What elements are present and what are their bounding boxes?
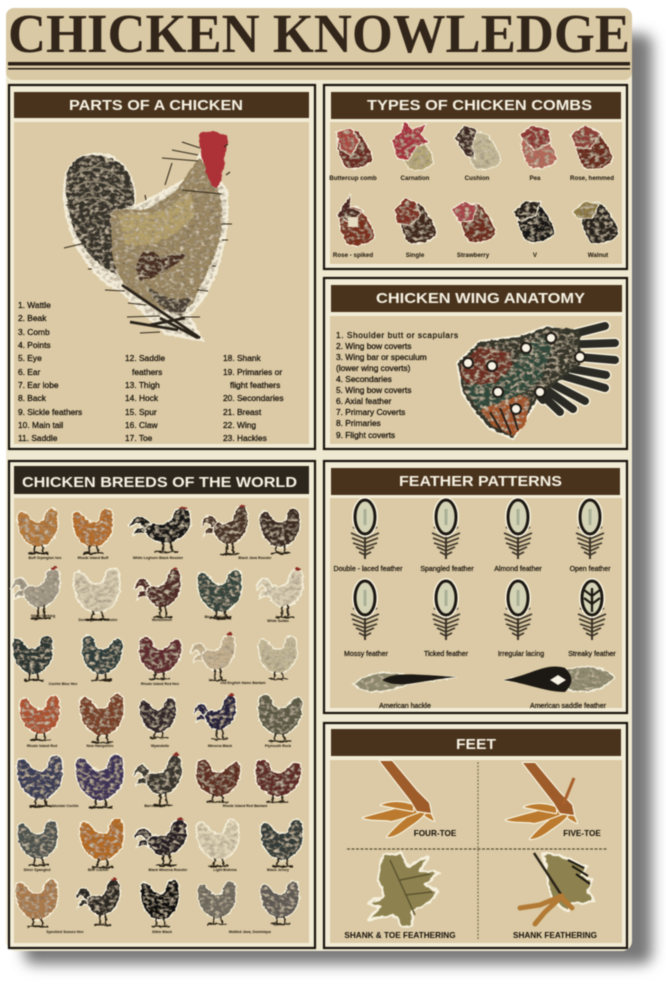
panel: feather patterns (324, 461, 627, 713)
panel: feet (324, 723, 627, 948)
legend column one: 4. Points (18, 340, 51, 350)
breed chickens row 2: Dorking White Rooster (79, 618, 118, 622)
heading: chicken breeds of the world: CHICKEN BREEDS OF THE WORLD (22, 474, 297, 491)
breed chickens row 7 (16, 877, 299, 934)
breed chickens row 7: Mottled Java, Dominique (229, 930, 271, 934)
foot: four-toe (363, 761, 457, 838)
heading: feet: FEET (456, 736, 496, 753)
icon: strawberry comb (452, 202, 495, 259)
icon: walnut comb: Walnut (588, 252, 608, 259)
breed chickens row 5: Rhode Island Red Bantam (223, 804, 267, 808)
heading: chicken wing anatomy (331, 285, 622, 312)
breed chickens row 3: Rhode Island Red Hen (141, 682, 179, 686)
legend column one (18, 300, 82, 443)
feather: spangled (420, 500, 474, 573)
breed chickens row 2: White Sultan (267, 619, 289, 623)
heading: chicken breeds of the world (14, 466, 309, 494)
illustration: rooster with pointer lines (63, 131, 232, 342)
breed chickens row 1: Black Java Rooster (238, 556, 272, 560)
breed chickens row 4: Rhode Island Red (27, 744, 57, 748)
feather: american hackle: American hackle (379, 703, 431, 710)
breed chickens row 6: Light Brahma (213, 868, 238, 872)
icon: strawberry comb: Strawberry (457, 252, 490, 259)
icon: pea comb (520, 126, 556, 182)
breed chickens row 6: Black Minorca Rooster (149, 868, 188, 872)
feather: ticked: Ticked feather (424, 651, 469, 658)
feather: streaky (568, 581, 616, 658)
breed chickens row 3 (13, 632, 297, 686)
icon: rose hemmed comb (570, 126, 614, 182)
breed chickens row 1: Rhode Island Buff (78, 556, 109, 560)
legend column three (223, 353, 284, 443)
icon: buttercup comb (329, 129, 377, 182)
legend column two: 14. Hock (125, 393, 159, 403)
feather: american saddle feather (503, 667, 615, 710)
icon: pea comb: Pea (529, 175, 541, 182)
heading: types of chicken combs (331, 92, 621, 119)
wing legend: 6. Axial feather (336, 396, 392, 406)
legend column three: 21. Breast (223, 407, 262, 417)
foot: shank feathering: SHANK FEATHERING (513, 931, 597, 940)
legend column two: 17. Toe (125, 433, 153, 443)
foot: four-toe: FOUR-TOE (414, 829, 457, 838)
wing legend: 9. Flight coverts (336, 430, 395, 440)
icon: carnation comb (392, 122, 433, 182)
legend column three: flight feathers (230, 380, 280, 390)
icon: rose spiked comb: Rose - spiked (333, 252, 373, 259)
breed chickens row 5: Blue Andalusian Cochin (37, 804, 79, 808)
foot: five-toe (506, 763, 601, 839)
breed chickens row 7: Silkie Black (152, 930, 172, 934)
breed chickens row 3: Old English Game Bantam (220, 681, 266, 685)
feather: irregular lacing: Irregular lacing (498, 651, 544, 658)
foot: five-toe: FIVE-TOE (563, 829, 601, 838)
breed chickens row 6: Black Jersey (267, 868, 289, 872)
breed chickens row 5 (17, 753, 301, 808)
legend column two (125, 353, 165, 443)
legend column one: 5. Eye (18, 353, 42, 363)
wing legend: 2. Wing bow coverts (336, 341, 411, 351)
feather: mossy (344, 581, 389, 658)
panel: chicken breeds of the world (9, 461, 315, 948)
legend column three: 18. Shank (223, 353, 262, 363)
feather: almond (494, 500, 542, 573)
icon: single comb (395, 199, 436, 259)
legend column one: 10. Main tail (18, 420, 63, 430)
feather: almond: Almond feather (494, 566, 542, 573)
icon: V comb (514, 202, 554, 259)
icon: carnation comb: Carnation (401, 175, 430, 182)
legend column three: 19. Primaries or (223, 367, 282, 377)
wing legend: 5. Wing bow coverts (336, 385, 411, 395)
foot: shank and toe feathering (344, 853, 456, 940)
legend column three: 20. Secondaries (223, 393, 284, 403)
icon: walnut comb (573, 202, 618, 259)
legend column one: 1. Wattle (18, 300, 51, 310)
heading: chicken wing anatomy: CHICKEN WING ANATOMY (376, 290, 585, 307)
breed chickens row 7: Speckled Sussex Hen (46, 930, 84, 934)
breed chickens row 2: Welsummer (152, 618, 173, 622)
legend column one: 2. Beak (18, 313, 47, 323)
wing legend (336, 330, 458, 440)
legend column one: 3. Comb (18, 327, 50, 337)
legend column two: 13. Thigh (125, 380, 160, 390)
breed chickens row 1: Buff Orpington hen (29, 556, 61, 560)
wing legend: 7. Primary Coverts (336, 407, 405, 417)
quadrant dividers (347, 762, 607, 940)
feather: spangled: Spangled feather (420, 566, 474, 573)
illustration: wing with numbered markers (458, 326, 615, 438)
feather: double-laced (334, 500, 403, 573)
wing legend: 1. Shoulder butt or scapulars (336, 330, 458, 340)
legend column three: 22. Wing (223, 420, 256, 430)
breed chickens row 4: New Hampshire (87, 744, 113, 748)
icon: rose hemmed comb: Rose, hemmed (570, 175, 614, 182)
icon: cushion comb: Cushion (465, 175, 490, 182)
breed chickens row 4: Wyandotte (151, 744, 169, 748)
legend column two: 12. Saddle (125, 353, 165, 363)
breed chickens row 1: White Leghorn Black Rooster (133, 556, 184, 560)
icon: rose spiked comb (333, 196, 374, 259)
breed chickens row 6 (18, 817, 302, 872)
heading: parts of a chicken: PARTS OF A CHICKEN (69, 97, 243, 114)
foot: shank feathering (513, 853, 597, 940)
feather: open (570, 500, 611, 573)
feather: american saddle feather: American saddle feather (530, 703, 607, 710)
legend column one: 8. Back (18, 393, 47, 403)
breed chickens row 2: Blue Australorp (205, 615, 232, 619)
icon: V comb: V (533, 252, 538, 259)
wing legend: 4. Secondaries (336, 374, 392, 384)
heading: types of chicken combs: TYPES OF CHICKEN COMBS (367, 97, 592, 114)
breed chickens row 5: Barred Rock (144, 804, 166, 808)
feather: double-laced: Double - laced feather (334, 566, 403, 573)
heading: feet (331, 729, 621, 756)
legend column two: 15. Spur (125, 407, 157, 417)
heading: feather patterns: FEATHER PATTERNS (399, 473, 562, 490)
heading: feather patterns (331, 468, 620, 495)
breed chickens row 4: Plymouth Rock (265, 744, 291, 748)
title: CHICKEN KNOWLEDGE (8, 3, 630, 64)
legend column one: 11. Saddle (18, 433, 58, 443)
legend column three: 23. Hackles (223, 433, 267, 443)
breed chickens row 2 (12, 566, 302, 623)
feather: american hackle (353, 672, 457, 710)
legend column two: feathers (132, 367, 162, 377)
breed chickens row 4 (20, 694, 302, 748)
feather: irregular lacing (498, 581, 544, 658)
legend column one: 6. Ear (18, 367, 41, 377)
panel: parts of a chicken (9, 85, 315, 449)
feather: mossy: Mossy feather (344, 651, 389, 658)
feather: streaky: Streaky feather (568, 651, 616, 658)
breed chickens row 6: Buff Cochin (88, 868, 108, 872)
wing legend: 8. Primaries (336, 418, 381, 428)
panel: chicken wing anatomy (324, 278, 627, 449)
legend column two: 16. Claw (125, 420, 159, 430)
breed chickens row 4: Minorca Black (208, 744, 232, 748)
feather: ticked (424, 581, 469, 658)
legend column one: 9. Sickle feathers (18, 407, 82, 417)
breed chickens row 6: Silver Spangled (24, 868, 50, 872)
icon: single comb: Single (406, 252, 425, 259)
legend column one: 7. Ear lobe (18, 380, 59, 390)
feather: open: Open feather (570, 566, 611, 573)
breed chickens row 3: Cochin Blue Hen (49, 682, 77, 686)
breed chickens row 2: Silver Dorking (31, 614, 55, 618)
icon: cushion comb (455, 126, 500, 182)
title band (6, 3, 632, 80)
breed chickens row 1 (18, 504, 299, 560)
wing legend: 3. Wing bar or speculum (336, 352, 427, 362)
wing legend: (lower wing coverts) (336, 363, 411, 373)
panel: types of chicken combs (324, 85, 627, 269)
icon: buttercup comb: Buttercup comb (329, 175, 377, 182)
foot: shank and toe feathering: SHANK & TOE FEATHERING (344, 931, 456, 940)
heading: parts of a chicken (14, 92, 309, 118)
